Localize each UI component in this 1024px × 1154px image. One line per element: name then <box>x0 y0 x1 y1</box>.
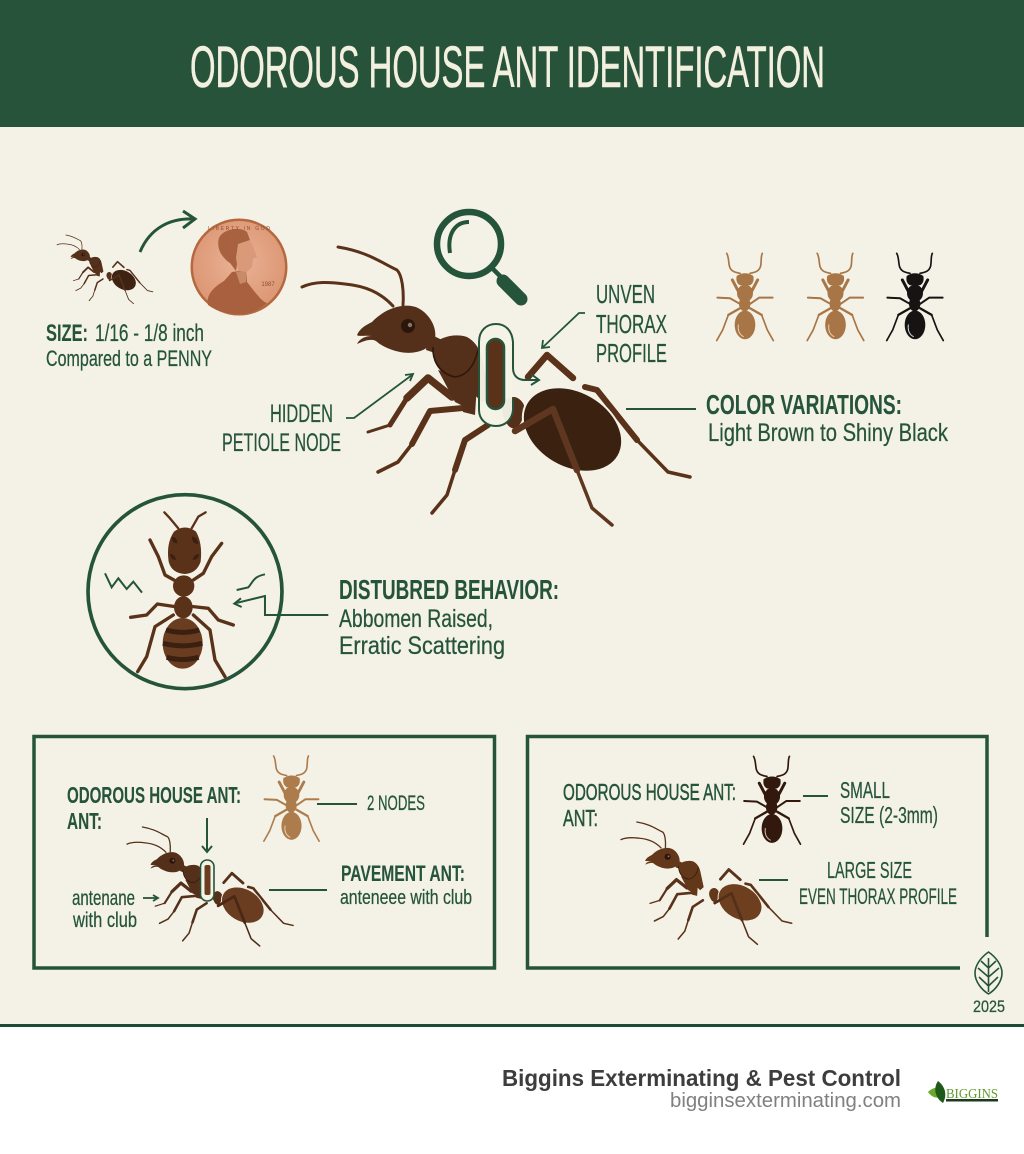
callout: color variations: Light Brown to Shiny Black <box>708 419 948 447</box>
panel heading: ODOROUS HOUSE ANT: <box>563 779 736 805</box>
header band <box>0 0 1024 127</box>
label: pavement ant: PAVEMENT ANT: <box>341 861 465 886</box>
panel: odorous house ant size comparison <box>528 736 987 968</box>
label: pavement ant: anteneee with club <box>340 887 472 909</box>
label: small size: SIZE (2-3mm) <box>840 802 938 828</box>
text: size: SIZE: <box>46 320 88 347</box>
footer logo: BIGGINS <box>946 1087 998 1102</box>
panel heading: ANT: <box>563 805 598 831</box>
footer logo <box>928 1081 998 1103</box>
icon: leaf <box>975 952 1002 994</box>
panel heading: ODOROUS HOUSE ANT: <box>67 782 241 808</box>
small ant for size comparison <box>57 235 153 304</box>
footer website: bigginsexterminating.com <box>670 1090 901 1112</box>
text: disturbed behavior: Erratic Scattering <box>339 632 505 660</box>
label: large size: LARGE SIZE <box>827 857 912 883</box>
text: size: 1/16 - 1/8 inch <box>95 320 204 347</box>
label: 2 nodes <box>317 792 425 815</box>
arrow: ant to penny <box>140 211 195 252</box>
callout: uneven thorax profile: THORAX <box>596 309 667 339</box>
callout: uneven thorax profile: PROFILE <box>596 338 667 368</box>
panel: odorous house ant vs pavement ant <box>34 736 494 968</box>
callout: uneven thorax profile: UNVEN <box>596 279 655 309</box>
odorous ant illustration <box>127 827 293 946</box>
petiole highlight and arrow <box>200 818 214 901</box>
callout: uneven thorax profile <box>542 279 667 368</box>
text: disturbed behavior <box>339 574 559 660</box>
footer background <box>0 1027 1024 1154</box>
callout: hidden petiole node: PETIOLE NODE <box>222 429 341 457</box>
icon: magnifying glass <box>437 212 521 299</box>
pavement ant illustration <box>264 756 319 841</box>
text: size <box>46 320 212 371</box>
label: antennae with club <box>72 887 158 932</box>
label: antennae with club: with club <box>72 909 137 932</box>
motion marks and pointer <box>105 573 328 615</box>
label: antennae with club: antenane <box>72 887 135 910</box>
panel heading <box>67 782 241 834</box>
panel heading: ANT: <box>67 808 102 834</box>
icon: penny: 1987 <box>261 282 275 288</box>
petiole highlight pill with arrow <box>479 324 539 426</box>
year: 2025 <box>973 997 1005 1016</box>
callout: color variations <box>626 389 948 447</box>
label: large size <box>759 857 957 909</box>
text: disturbed behavior: DISTUBRED BEHAVIOR: <box>339 574 559 605</box>
callout: color variations: COLOR VARIATIONS: <box>706 389 902 420</box>
small dark ant illustration <box>744 756 800 844</box>
icon: penny: LIBERTY IN GOD <box>208 226 270 232</box>
callout: hidden petiole node <box>222 374 413 457</box>
panel heading <box>563 779 736 831</box>
footer company name: Biggins Exterminating & Pest Control <box>502 1065 901 1091</box>
color variation ants <box>717 253 943 341</box>
text: size: Compared to a PENNY <box>46 346 212 371</box>
disturbed behavior circle icon <box>88 495 282 689</box>
callout: hidden petiole node: HIDDEN <box>270 400 333 428</box>
label: 2 nodes: 2 NODES <box>367 792 425 815</box>
label: small size <box>803 777 938 828</box>
main ant <box>302 247 690 525</box>
icon: penny <box>190 218 288 316</box>
label: small size: SMALL <box>840 777 890 803</box>
label: pavement ant <box>269 861 472 909</box>
text: disturbed behavior: Abbomen Raised, <box>339 605 493 633</box>
footer divider <box>0 1024 1024 1027</box>
large ant illustration <box>621 822 792 944</box>
